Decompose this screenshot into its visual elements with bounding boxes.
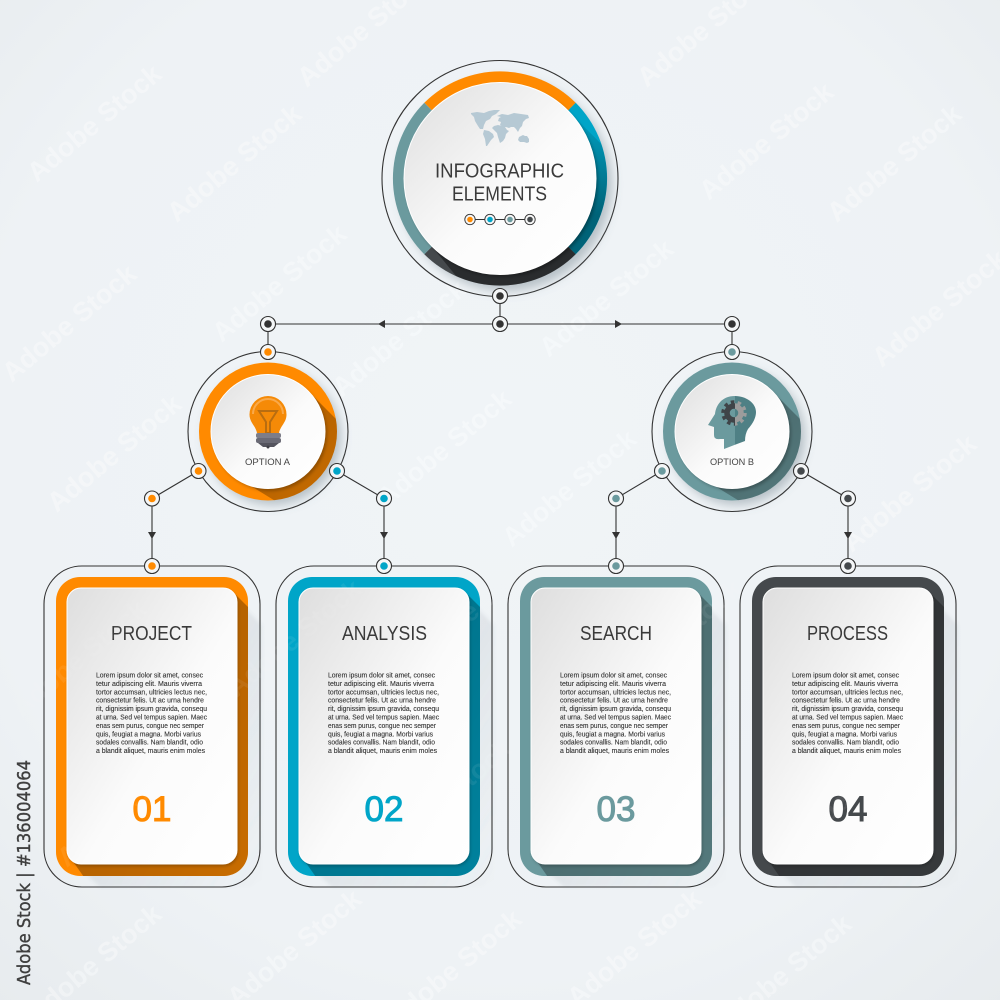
text block: Lorem ipsum dolor sit amet, consec [328,670,435,680]
panel: main circle [381,60,619,297]
watermark: Adobe Stock [0,258,143,388]
text block: enas sem purus, congue nec semper [328,721,436,730]
watermark over panels: Adobe Stock [6,593,153,723]
text block: rit, dignissim ipsum gravida, consequ [792,704,903,713]
text block: quis, feugiat a magna. Morbi varius [96,729,201,738]
watermark over panels: Adobe Stock [221,573,368,703]
watermark: Adobe Stock [41,388,188,518]
text block: tortor accumsan, ultricies lectus nec, [560,687,671,696]
number: 04 [829,790,867,829]
watermark: Adobe Stock [836,428,983,558]
label: option A: OPTION A [245,457,291,468]
watermark: Adobe Stock [371,383,518,513]
text block [328,670,439,755]
watermark over panels: Adobe Stock [371,733,518,863]
icon: light bulb [250,396,286,448]
watermark: Adobe Stock [326,273,473,403]
panel: card 04 process [740,566,966,900]
text block [560,670,671,755]
heading: SEARCH [580,623,652,645]
arrows [148,320,852,539]
text block: Lorem ipsum dolor sit amet, consec [560,670,667,680]
text block: tortor accumsan, ultricies lectus nec, [792,687,903,696]
label: option B: OPTION B [710,457,754,468]
text block: sodales convallis. Nam blandit, odio [560,738,667,747]
text block: tetur adipiscing elit. Mauris viverra [560,679,667,688]
text block: quis, feugiat a magna. Morbi varius [328,729,433,738]
watermark: Adobe Stock [693,76,840,206]
panel: card 02 analysis [276,566,502,900]
text block: sodales convallis. Nam blandit, odio [96,738,203,747]
text block: tortor accumsan, ultricies lectus nec, [96,687,207,696]
title: ELEMENTS [452,184,547,206]
text block [96,670,207,755]
text block: enas sem purus, congue nec semper [96,721,204,730]
watermark: Adobe Stock [821,98,968,228]
text block: tetur adipiscing elit. Mauris viverra [96,679,203,688]
text block: consectetur felis. Ut ac urna hendre [328,696,436,705]
text block: rit, dignissim ipsum gravida, consequ [560,704,671,713]
mini node row [465,214,535,225]
text block: tortor accumsan, ultricies lectus nec, [328,687,439,696]
watermark: Adobe Stock [21,58,168,188]
heading: PROJECT [111,623,192,645]
ring segment: blue [500,103,607,254]
watermark over panels: Adobe Stock [401,543,548,673]
text block: enas sem purus, congue nec semper [560,721,668,730]
icon: world map [471,110,529,146]
text block: consectetur felis. Ut ac urna hendre [96,696,204,705]
heading: PROCESS [807,623,888,645]
text block: enas sem purus, congue nec semper [792,721,900,730]
icon: head with gear [708,396,756,449]
text block: at urna. Sed vel tempus sapien. Maec [96,712,207,722]
credit text: Adobe Stock | #136004064 [14,760,35,985]
panel: card 01 project [44,566,270,900]
text block: Lorem ipsum dolor sit amet, consec [792,670,899,680]
connector nodes [144,288,856,574]
number: 03 [597,790,635,829]
text block: a blandit aliquet, mauris enim moles [560,746,669,755]
heading: ANALYSIS [342,623,427,645]
text block: at urna. Sed vel tempus sapien. Maec [328,712,439,722]
panel: option B [652,352,814,512]
ring segment: orange [424,71,576,178]
watermark: Adobe Stock [161,98,308,228]
panel: card 03 search [508,566,734,900]
text block: a blandit aliquet, mauris enim moles [96,746,205,755]
text block: consectetur felis. Ut ac urna hendre [792,696,900,705]
text block: tetur adipiscing elit. Mauris viverra [328,679,435,688]
connector lines [152,296,848,566]
watermark over panels: Adobe Stock [51,743,198,873]
text block: tetur adipiscing elit. Mauris viverra [792,679,899,688]
text block: sodales convallis. Nam blandit, odio [792,738,899,747]
text block: at urna. Sed vel tempus sapien. Maec [792,712,903,722]
text block: a blandit aliquet, mauris enim moles [328,746,437,755]
text block: a blandit aliquet, mauris enim moles [792,746,901,755]
watermark over panels [6,543,918,873]
title: INFOGRAPHIC [435,160,564,182]
ring segment: teal [393,103,500,254]
text block: quis, feugiat a magna. Morbi varius [560,729,665,738]
number: 01 [133,790,171,829]
text block: sodales convallis. Nam blandit, odio [328,738,435,747]
text block: rit, dignissim ipsum gravida, consequ [328,704,439,713]
number: 02 [365,790,403,829]
ring segment: dark [424,178,576,286]
watermark over panels: Adobe Stock [601,573,748,703]
watermark: Adobe Stock [496,423,643,553]
title [435,160,564,206]
text block: at urna. Sed vel tempus sapien. Maec [560,712,671,722]
text block: Lorem ipsum dolor sit amet, consec [96,670,203,680]
text block: consectetur felis. Ut ac urna hendre [560,696,668,705]
text block: rit, dignissim ipsum gravida, consequ [96,704,207,713]
watermark over panels: Adobe Stock [771,733,918,863]
panel: option A [188,352,350,512]
text block: quis, feugiat a magna. Morbi varius [792,729,897,738]
text block [792,670,903,755]
watermark: Adobe Stock [533,233,680,363]
watermark: Adobe Stock [206,218,353,348]
